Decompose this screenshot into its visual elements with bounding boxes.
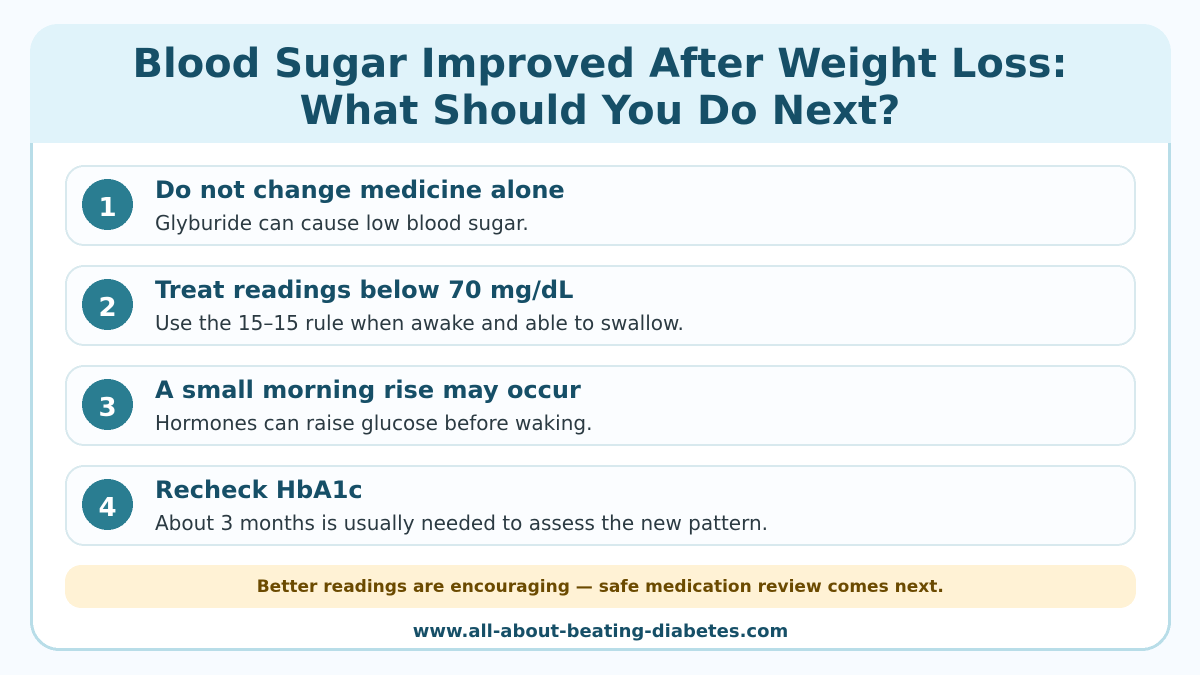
step 4 text: About 3 months is usually needed to assess the new pattern. bbox=[155, 511, 768, 535]
step 4 heading: Recheck HbA1c bbox=[155, 476, 363, 504]
step 1 text: Glyburide can cause low blood sugar. bbox=[155, 211, 529, 235]
step 3 text: Hormones can raise glucose before waking. bbox=[155, 411, 592, 435]
step 3 badge: 3 bbox=[98, 393, 117, 423]
callout: Better readings are encouraging — safe medication review comes next. bbox=[257, 577, 944, 597]
title: Blood Sugar Improved After Weight Loss: bbox=[133, 41, 1067, 87]
panel: step 4 bbox=[66, 466, 1135, 545]
panel: step 2 bbox=[66, 266, 1135, 345]
step 1 heading: Do not change medicine alone bbox=[155, 176, 565, 204]
panel: step 3 bbox=[66, 366, 1135, 445]
header band bbox=[30, 24, 1171, 143]
step 1 badge: 1 bbox=[98, 193, 117, 223]
title bbox=[133, 41, 1067, 134]
step 1 badge bbox=[82, 179, 133, 230]
panel: step 1 bbox=[66, 166, 1135, 245]
step 3 badge bbox=[82, 379, 133, 430]
step 3 heading: A small morning rise may occur bbox=[155, 376, 581, 404]
step 4 badge: 4 bbox=[98, 493, 117, 523]
step 2 heading: Treat readings below 70 mg/dL bbox=[155, 276, 573, 304]
title: What Should You Do Next? bbox=[300, 88, 900, 134]
callout bbox=[65, 565, 1136, 608]
step 4 badge bbox=[82, 479, 133, 530]
footer url: www.all-about-beating-diabetes.com bbox=[413, 621, 788, 642]
step 2 text: Use the 15–15 rule when awake and able to swallow. bbox=[155, 311, 684, 335]
step 2 badge bbox=[82, 279, 133, 330]
step 2 badge: 2 bbox=[98, 293, 117, 323]
